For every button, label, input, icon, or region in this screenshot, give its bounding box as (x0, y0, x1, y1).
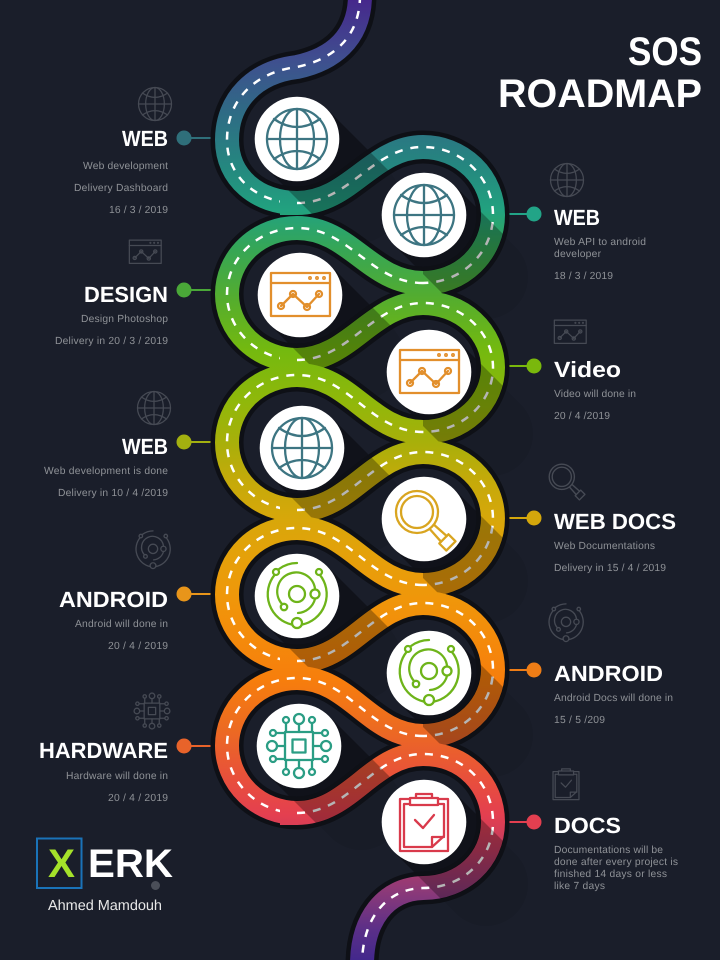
panel: docs right: finished 14 days or less (554, 869, 667, 880)
panel: web left 2: Delivery in 10 / 4 /2019 (58, 488, 168, 499)
icon: globe circle right 1 (382, 173, 466, 257)
panel: web right: 18 / 3 / 2019 (554, 271, 613, 282)
icon: chart window circle left 2 (258, 253, 342, 337)
logo: ERK (88, 842, 173, 886)
panel: docs right: Documentations will be (554, 845, 663, 856)
leader lines and dots (176, 130, 542, 830)
panel: hardware left (39, 693, 170, 804)
panel: web left: 16 / 3 / 2019 (109, 205, 168, 216)
icon: chip circle left 5 (257, 704, 341, 788)
panel: android right: 15 / 5 /209 (554, 715, 605, 726)
panel: web docs right (549, 464, 676, 574)
panel: android left: Android will done in (75, 619, 168, 630)
panel: android right: ANDROID (554, 661, 663, 686)
icon: chart window circle right 2 (387, 330, 471, 414)
logo (37, 838, 173, 914)
panel: design left: Design Photoshop (81, 314, 168, 325)
panel: video right: Video (554, 357, 621, 382)
icon: magnifier circle right 3 (382, 477, 466, 561)
panel: docs right: DOCS (554, 813, 621, 838)
panel: hardware left: HARDWARE (39, 738, 168, 763)
panel: web left 2 (44, 392, 170, 499)
panel: web right (550, 164, 646, 282)
panel: hardware left: 20 / 4 / 2019 (108, 793, 168, 804)
panel: web right: Web API to android (554, 237, 646, 248)
title (498, 30, 702, 116)
panel: design left: DESIGN (84, 282, 168, 307)
panel: web docs right: WEB DOCS (554, 509, 676, 534)
panel: web left 2: WEB (122, 434, 168, 459)
panel: web left: Delivery Dashboard (74, 183, 168, 194)
panel: web right: WEB (554, 205, 600, 230)
logo: X (48, 842, 75, 886)
panel: web left: Web development (83, 161, 168, 172)
icon: orbit circle right 4 (387, 631, 471, 715)
icon: orbit circle left 4 (255, 554, 339, 638)
panel: android left (59, 531, 170, 652)
panel: android left: ANDROID (59, 587, 168, 612)
panel: web docs right: Delivery in 15 / 4 / 2019 (554, 563, 666, 574)
panel: android left: 20 / 4 / 2019 (108, 641, 168, 652)
panel: docs right (553, 769, 678, 892)
icon: clipboard circle right 5 (382, 780, 466, 864)
long shadows of the circles (267, 109, 504, 897)
panel: docs right: like 7 days (554, 881, 605, 892)
icon: globe circle left 3 (260, 406, 344, 490)
title: SOS (628, 30, 702, 74)
panel: web left: WEB (122, 126, 168, 151)
panel: design left: Delivery in 20 / 3 / 2019 (55, 336, 168, 347)
panel: android right: Android Docs will done in (554, 693, 673, 704)
title: ROADMAP (498, 72, 702, 116)
panel: web left 2: Web development is done (44, 466, 168, 477)
panel: video right: Video will done in (554, 389, 636, 400)
panel: docs right: done after every project is (554, 857, 678, 868)
panel: video right (554, 320, 636, 422)
panel: hardware left: Hardware will done in (66, 771, 168, 782)
panel: web docs right: Web Documentations (554, 541, 655, 552)
panel: web left (74, 88, 172, 216)
panel: android right (549, 604, 673, 726)
winding road (227, 0, 493, 960)
panel: design left (55, 240, 168, 347)
logo: Ahmed Mamdouh (48, 898, 162, 914)
panel: video right: 20 / 4 /2019 (554, 411, 610, 422)
panel: web right: developer (554, 249, 602, 260)
icon: globe circle left 1 (255, 97, 339, 181)
